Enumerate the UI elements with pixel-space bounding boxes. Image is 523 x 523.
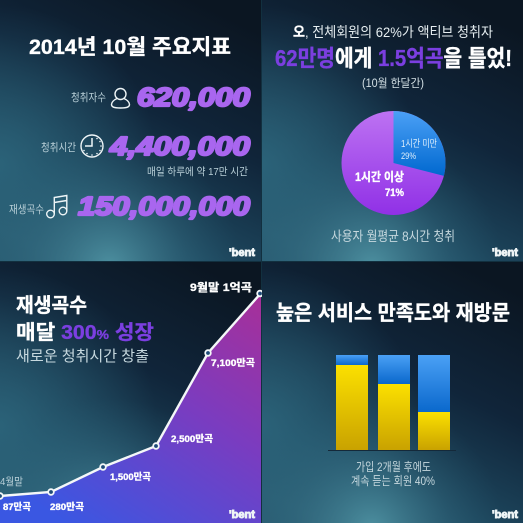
pie chart [342, 111, 446, 215]
logo: 'bent [492, 509, 518, 521]
label: listeners: 청취자수 [71, 91, 106, 104]
icon: clock [81, 135, 103, 157]
pie value: 71%: 71% [385, 187, 404, 199]
number: 4,400,000: 4,400,000 [109, 131, 251, 161]
period note: (10월 한달간) [362, 76, 424, 90]
icon: music note [47, 196, 67, 218]
logo: 'bent [229, 509, 255, 521]
heading: plays: 재생곡수 [16, 294, 87, 317]
area chart [0, 293, 261, 523]
label: listening time: 청취시간 [41, 141, 76, 154]
title: 2014년 10월 주요지표 [29, 36, 231, 59]
icon: person [112, 88, 130, 108]
pie label: under 1 hour: 1시간 미만 [401, 138, 437, 150]
data label: 100M end of September: 9월말 1억곡 [190, 280, 252, 294]
data label: 71M: 7,100만곡 [211, 358, 255, 369]
logo: 'bent [229, 247, 255, 259]
pie value: 29%: 29% [401, 151, 416, 161]
caption line 2: 계속 듣는 회원 40% [351, 474, 435, 488]
stacked bar chart [328, 355, 456, 451]
data label: 25M: 2,500만곡 [171, 434, 213, 445]
subheading: 새로운 청취시간 창출 [16, 348, 149, 365]
title: 높은 서비스 만족도와 재방문 [276, 302, 510, 325]
heading: 300% growth: 매달 300% 성장 [16, 321, 154, 344]
data label: 15M: 1,500만곡 [110, 472, 151, 483]
label: plays: 재생곡수 [9, 203, 44, 216]
data label: 2.8M: 280만곡 [50, 502, 84, 513]
panel: satisfaction and return [262, 262, 523, 523]
logo: 'bent [492, 247, 518, 259]
caption line 1: 가입 2개월 후에도 [356, 460, 431, 474]
panel: key metrics [0, 0, 261, 261]
data label: 870k: 87만곡 [3, 502, 31, 513]
caption: 사용자 월평균 8시간 청취 [331, 229, 455, 244]
intro line: 오, 전체회원의 62%가 액티브 청취자 [293, 24, 493, 40]
pie label: over 1 hour: 1시간 이상 [355, 170, 404, 184]
number: 620,000: 620,000 [137, 82, 251, 112]
line with markers [0, 291, 263, 499]
panel: active listeners pie [262, 0, 523, 261]
number: 150,000,000: 150,000,000 [78, 191, 251, 221]
label: end of April: 4월말 [0, 476, 23, 488]
headline: 62만명에게 1.5억곡을 틀었! [275, 45, 512, 71]
note: daily hours: 매일 하루에 약 17만 시간 [147, 165, 248, 178]
panel: monthly growth [0, 262, 263, 523]
